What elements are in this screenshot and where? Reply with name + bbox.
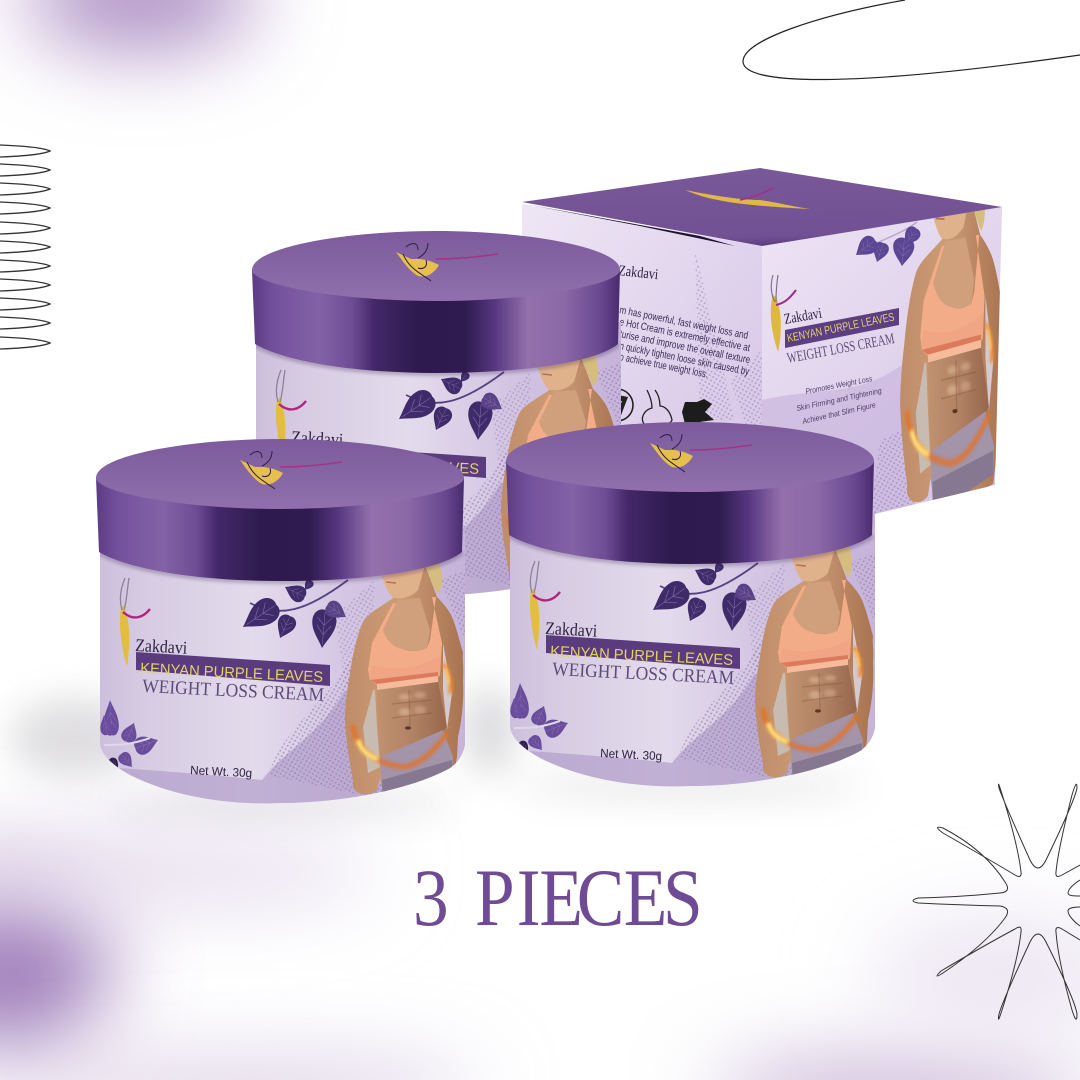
box description text: turise and improve the overall texture [618,328,751,366]
box left face [522,204,762,426]
product box [522,168,1003,545]
box right label text: Skin Firming and Tightening [796,386,883,413]
jar label text back: KENYAN PURPLE LEAVES [296,452,479,478]
box description text: n quickly tighten loose skin caused by [618,340,751,378]
jar label text right: KENYAN PURPLE LEAVES [550,643,733,669]
decorative ellipse line top right [743,0,1080,80]
box logo mark [771,275,796,352]
box description text [618,304,751,381]
jar: front left [96,439,465,810]
jar label text back [291,427,486,478]
box right label text [783,306,899,426]
box woman [900,210,1000,502]
box top flap [522,168,1002,246]
box description text: m has powerful, fast weight loss and [618,304,749,342]
jar label text left: KENYAN PURPLE LEAVES [140,660,323,686]
jar label text left [135,635,330,780]
box description text: e Hot Cream is extremely effective at [618,316,751,354]
box leaves [856,222,920,266]
soft shadows under jars [10,685,865,811]
box icons: seal, rabbit, recycle [601,389,714,427]
box left face: Zakdavi [618,263,659,283]
jar label text back: Zakdavi [291,427,344,450]
jar label text right [545,618,740,763]
jar: front right [506,422,875,793]
decorative spring lines left [0,145,50,349]
jar label text left: Net Wt. 30g [190,763,252,780]
box right face [762,207,1002,514]
box right label text: Promotes Weight Loss [805,374,873,396]
jar label text right: Net Wt. 30g [600,746,662,763]
jar label text right: Zakdavi [545,618,598,641]
jar: back [252,231,621,602]
heading: 3 pieces: 3 PIECES [413,852,703,943]
jar label text right: WEIGHT LOSS CREAM [552,659,735,689]
decorative star outline bottom right [913,784,1080,1019]
box right label text: KENYAN PURPLE LEAVES [786,311,896,345]
box right label text: Achieve that Slim Figure [801,400,877,426]
jar label text left: Zakdavi [135,635,188,658]
box right label text: Zakdavi [783,306,823,328]
jar label text left: WEIGHT LOSS CREAM [142,676,325,706]
box description text: o achieve true weight loss. [618,351,709,381]
box right label text: WEIGHT LOSS CREAM [786,331,896,367]
